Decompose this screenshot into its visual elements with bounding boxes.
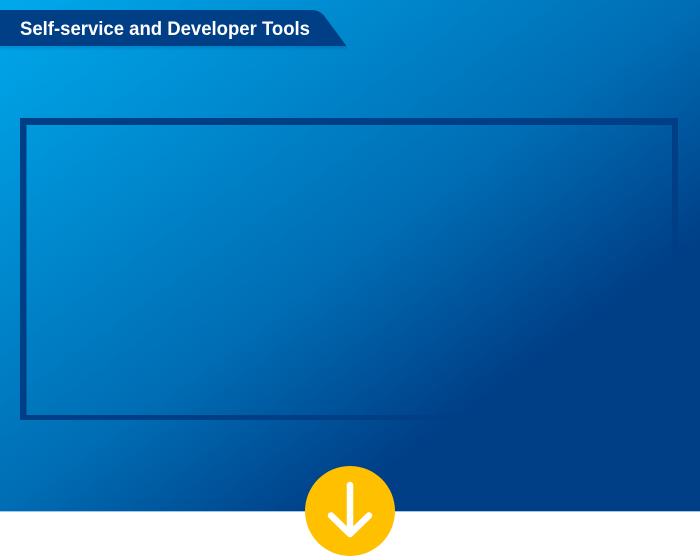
icon: yellow circle with down arrow <box>305 466 395 556</box>
heading: title banner: Self-service and Developer Tools <box>20 19 310 40</box>
heading: title banner <box>0 10 347 51</box>
panel: empty framed content box <box>20 118 678 420</box>
